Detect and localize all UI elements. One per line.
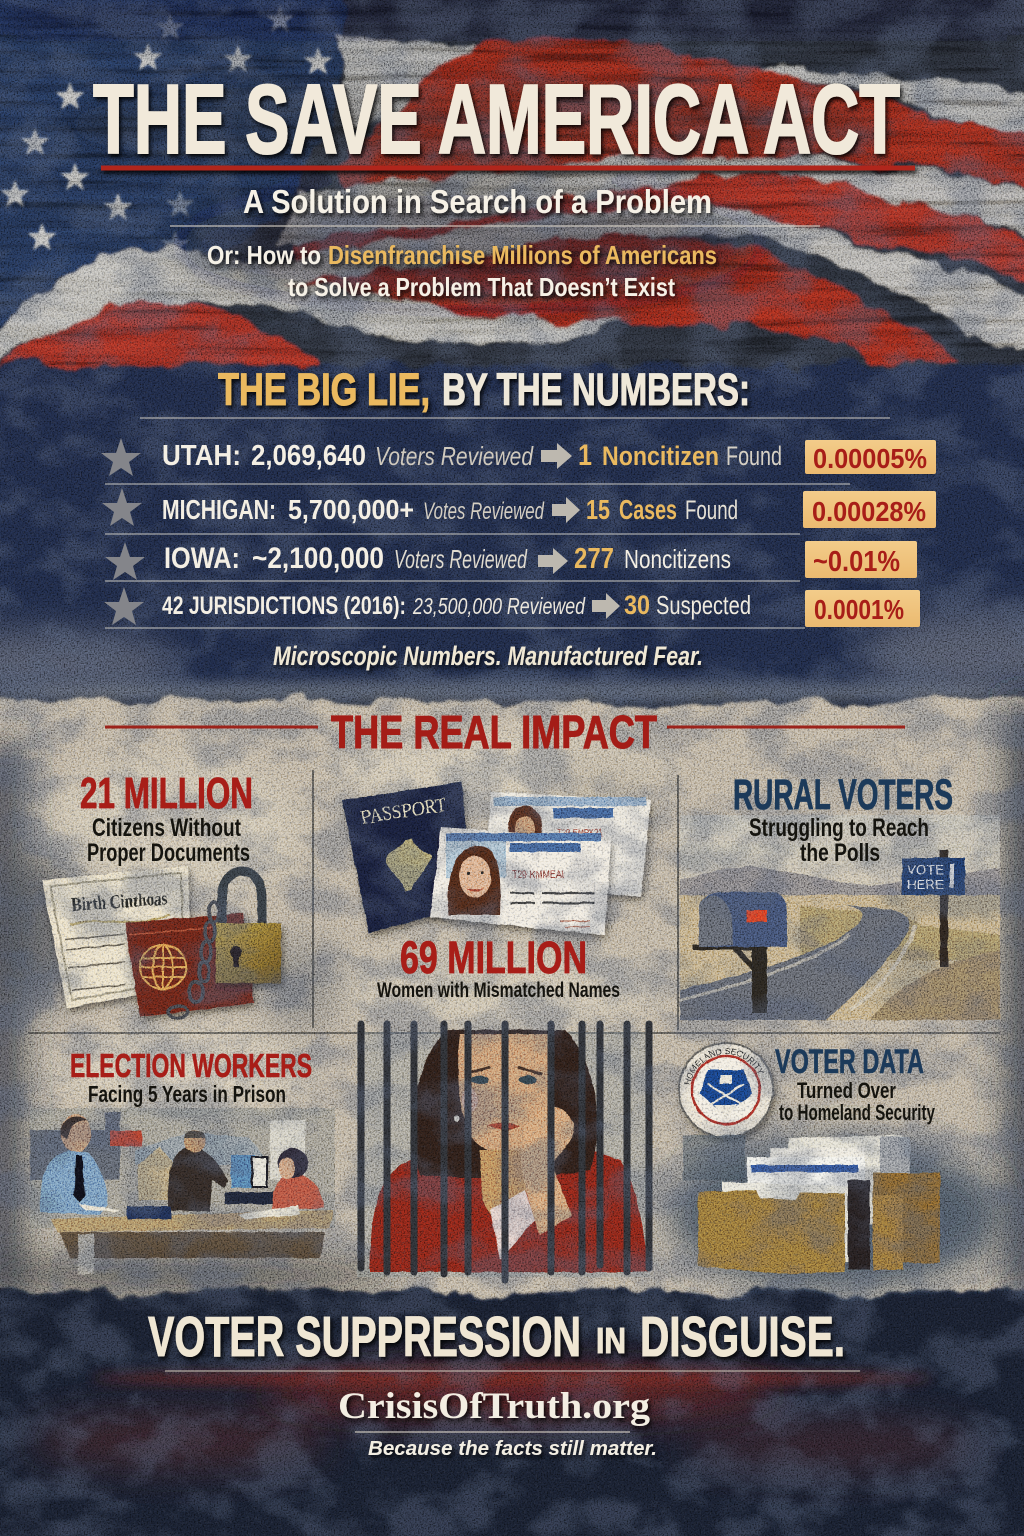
background: flag stars bbox=[1, 5, 332, 257]
icon: star bbox=[102, 488, 142, 526]
illustration: birth certificate, red passport, padlock and chain: Birth Cinthoas bbox=[71, 888, 168, 916]
row: michigan: 5,700,000+ bbox=[288, 494, 414, 525]
illustration: woman behind prison bars bbox=[357, 1030, 650, 1277]
row: michigan: MICHIGAN: bbox=[162, 494, 276, 525]
section heading: the big lie bbox=[218, 364, 750, 415]
subtitle divider bbox=[170, 225, 820, 227]
icon: star bbox=[104, 587, 144, 625]
row: 42 jurisdictions bbox=[104, 587, 920, 627]
panel text: rural voters bbox=[733, 771, 953, 867]
panel text: 69 million bbox=[377, 932, 620, 1002]
arrow bbox=[541, 443, 572, 469]
row: 42 jurisdictions: 23,500,000 Reviewed bbox=[412, 593, 586, 619]
illustration: passport and driver licences: T29 EMRK21 bbox=[557, 828, 603, 839]
title underline bbox=[101, 166, 915, 170]
background: navy statistics field bbox=[0, 365, 1024, 695]
illustration: passport and driver licences: T29 KMMEAI bbox=[512, 869, 564, 881]
row: utah: 2,069,640 bbox=[251, 440, 366, 472]
texture: flag fabric streaks bbox=[0, 0, 1024, 370]
panel text: 21 million: 21 MILLION bbox=[80, 769, 253, 818]
illustration: rural road, mailbox and vote here sign: HERE bbox=[907, 877, 944, 892]
arrow bbox=[538, 548, 568, 574]
row: 42 jurisdictions: Suspected bbox=[656, 590, 751, 620]
closing statement: VOTER SUPPRESSION bbox=[148, 1305, 581, 1369]
panel text: 69 million: 69 MILLION bbox=[400, 932, 587, 983]
row: iowa: IOWA: bbox=[164, 542, 240, 575]
row: utah: Voters Reviewed bbox=[375, 441, 534, 471]
row: utah: Found bbox=[726, 441, 782, 471]
panel text: election workers: ELECTION WORKERS bbox=[70, 1047, 312, 1084]
illustration: rural road, mailbox and vote here sign bbox=[680, 815, 1000, 1020]
row: iowa: Voters Reviewed bbox=[394, 544, 528, 574]
panel text: voter data: to Homeland Security bbox=[779, 1100, 936, 1125]
badge: 0.00028% bbox=[812, 496, 926, 527]
illustration: birth certificate, red passport, padlock and chain bbox=[42, 866, 281, 1018]
row: utah: UTAH: bbox=[162, 440, 241, 472]
website name: CrisisOfTruth.org bbox=[338, 1386, 651, 1427]
badge: ~0.01% bbox=[813, 546, 900, 578]
badge: 0.0001% bbox=[814, 594, 904, 625]
row: iowa bbox=[105, 541, 917, 580]
panel text: election workers bbox=[70, 1047, 312, 1107]
background: aged paper panel bbox=[0, 700, 1024, 1300]
illustration: homeland security seal: HOMELAND SECURITY bbox=[684, 1048, 764, 1084]
panel text: 21 million: Proper Documents bbox=[87, 839, 250, 867]
icon: star bbox=[101, 438, 141, 476]
panel text: election workers: Facing 5 Years in Prison bbox=[88, 1081, 286, 1107]
panel text: 21 million bbox=[80, 769, 253, 867]
prison bars bbox=[361, 1024, 649, 1280]
shading behind header text bbox=[0, 0, 1024, 305]
website divider bbox=[355, 1431, 630, 1433]
row: 42 jurisdictions: 30 bbox=[624, 590, 650, 620]
tagline: to Solve a Problem That Doesn’t Exist bbox=[288, 272, 675, 302]
panel dividers bbox=[28, 770, 1000, 1033]
row: michigan: 15 bbox=[586, 494, 610, 525]
illustration: election workers at a polling place bbox=[30, 1108, 335, 1274]
panel text: voter data bbox=[775, 1043, 936, 1125]
row: michigan bbox=[102, 488, 936, 528]
tagline: Or: How to bbox=[207, 240, 321, 270]
icon: star bbox=[105, 542, 145, 580]
background: dark footer band bbox=[0, 1295, 1024, 1536]
website tagline: Because the facts still matter. bbox=[368, 1438, 657, 1460]
closing statement: DISGUISE. bbox=[640, 1305, 845, 1369]
section heading: the big lie: THE BIG LIE, bbox=[218, 364, 430, 415]
illustration: passport and driver licences bbox=[342, 782, 651, 935]
section heading: the big lie: BY THE NUMBERS: bbox=[442, 364, 750, 415]
stats tagline: Microscopic Numbers. Manufactured Fear. bbox=[273, 641, 703, 671]
tagline bbox=[207, 240, 717, 302]
section heading: the real impact: THE REAL IMPACT bbox=[331, 706, 657, 758]
row: michigan: Cases bbox=[619, 494, 677, 525]
arrow bbox=[592, 593, 620, 619]
closing statement: IN bbox=[596, 1320, 626, 1361]
row: 42 jurisdictions: 42 JURISDICTIONS (2016): bbox=[162, 592, 406, 620]
panel text: 69 million: Women with Mismatched Names bbox=[377, 979, 620, 1002]
illustration: homeland security seal bbox=[675, 1040, 782, 1144]
illustration: overflowing voter data folders bbox=[683, 1135, 940, 1274]
panel text: voter data: VOTER DATA bbox=[775, 1043, 924, 1081]
heading divider bbox=[140, 417, 890, 419]
row: iowa: 277 bbox=[574, 543, 614, 575]
row: utah: 1 bbox=[578, 439, 592, 472]
row: iowa: ~2,100,000 bbox=[252, 542, 384, 575]
panel text: 21 million: Citizens Without bbox=[92, 814, 242, 842]
closing divider bbox=[165, 1370, 860, 1372]
arrow bbox=[552, 497, 580, 523]
panel text: voter data: Turned Over bbox=[797, 1078, 896, 1103]
subtitle: A Solution in Search of a Problem bbox=[243, 183, 712, 220]
row: utah bbox=[101, 438, 936, 476]
background: distressed american flag bbox=[0, 0, 1024, 380]
tagline: Disenfranchise Millions of Americans bbox=[328, 240, 717, 270]
row: michigan: Votes Reviewed bbox=[423, 498, 544, 525]
badge: 0.00005% bbox=[813, 443, 927, 474]
panel text: rural voters: Struggling to Reach bbox=[749, 814, 929, 842]
row: iowa: Noncitizens bbox=[624, 544, 731, 574]
panel text: rural voters: the Polls bbox=[800, 839, 880, 867]
illustration: passport and driver licences: PASSPORT bbox=[359, 794, 448, 829]
row: utah: Noncitizen bbox=[602, 441, 719, 471]
illustration: rural road, mailbox and vote here sign: VOTE bbox=[907, 862, 944, 877]
row: michigan: Found bbox=[685, 495, 738, 525]
